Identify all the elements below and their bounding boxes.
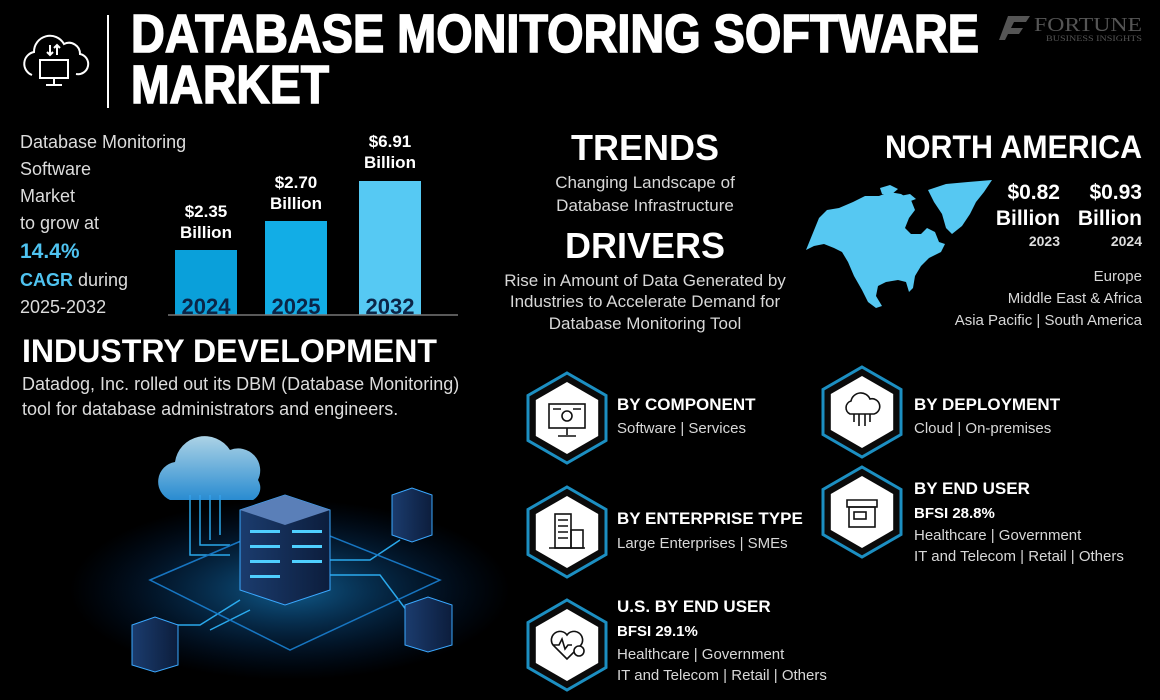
text: trends: Database Infrastructure: [556, 196, 734, 215]
heading: north america: NORTH AMERICA: [885, 129, 1142, 165]
text block: market growth: Market: [20, 186, 75, 206]
bar chart: Billion: [364, 153, 416, 172]
segment: by end user: IT and Telecom | Retail | Others: [914, 548, 1124, 565]
logo: [999, 14, 1142, 43]
text block: market growth: [20, 132, 186, 317]
segment: by component: BY COMPONENT: [617, 395, 756, 414]
heading: industry development: INDUSTRY DEVELOPMENT: [22, 333, 437, 369]
bar chart: 2024: [182, 294, 231, 319]
stats: north america values: 2023: [1029, 233, 1060, 249]
stats: north america values: $0.93: [1089, 181, 1142, 204]
title: DATABASE MONITORING SOFTWARE: [131, 4, 979, 64]
segment: by component: Software | Services: [617, 420, 746, 437]
heading: drivers: DRIVERS: [565, 225, 725, 266]
text: drivers: [504, 271, 786, 333]
text block: market growth: 14.4%: [20, 240, 80, 263]
segment: by enterprise type: [528, 487, 803, 577]
text: drivers: Industries to Accelerate Demand for: [510, 292, 780, 311]
segment: by deployment: BY DEPLOYMENT: [914, 395, 1061, 414]
text block: market growth: CAGR during: [20, 270, 128, 290]
stats: north america values: [996, 181, 1142, 249]
segment: by enterprise type: Large Enterprises | SMEs: [617, 535, 788, 552]
text block: market growth: to grow at: [20, 213, 99, 233]
text: other regions: Europe: [1094, 268, 1142, 285]
text block: market growth: 2025-2032: [20, 297, 106, 317]
segment: by deployment: Cloud | On-premises: [914, 420, 1051, 437]
bar chart: 2032: [366, 294, 414, 319]
heading: trends: TRENDS: [571, 127, 719, 168]
bar chart: Billion: [270, 194, 322, 213]
segment: u.s. by end user: Healthcare | Government: [617, 646, 785, 663]
segment: u.s. by end user: IT and Telecom | Retail | Others: [617, 667, 827, 684]
text: other regions: Middle East & Africa: [1008, 290, 1143, 307]
text: industry development: tool for database administrators and engineers.: [22, 399, 398, 419]
text: industry development: [22, 374, 459, 419]
map: north america: [806, 180, 992, 308]
stats: north america values: Billion: [1078, 207, 1142, 230]
bar chart: $6.91: [369, 132, 411, 151]
cloud: [158, 436, 260, 500]
servers: [132, 488, 452, 672]
bar chart: [168, 132, 458, 319]
text: other regions: [955, 268, 1143, 329]
illustration: cloud and servers: [70, 436, 510, 680]
text: trends: Changing Landscape of: [555, 173, 735, 192]
stats: north america values: Billion: [996, 207, 1060, 230]
text: trends: [555, 173, 735, 215]
segment: by end user: BY END USER: [914, 479, 1030, 498]
icon: cloud monitor: [24, 36, 88, 85]
stats: north america values: $0.82: [1007, 181, 1060, 204]
segment: by deployment: [823, 367, 1061, 457]
bar chart: Billion: [180, 223, 232, 242]
segment: by end user: Healthcare | Government: [914, 527, 1082, 544]
logo: BUSINESS INSIGHTS: [1046, 33, 1142, 43]
text: drivers: Rise in Amount of Data Generated by: [504, 271, 786, 290]
segment: u.s. by end user: U.S. BY END USER: [617, 597, 771, 616]
segment: by end user: [823, 467, 1124, 565]
bar chart: $2.70: [275, 173, 317, 192]
text: drivers: Database Monitoring Tool: [549, 314, 741, 333]
title: [131, 4, 979, 115]
stats: north america values: 2024: [1111, 233, 1142, 249]
text: other regions: Asia Pacific | South America: [955, 312, 1143, 329]
text: industry development: Datadog, Inc. rolled out its DBM (Database Monitoring): [22, 374, 459, 394]
logo: FORTUNE: [1034, 14, 1142, 36]
segment: by end user: BFSI 28.8%: [914, 505, 995, 522]
bar chart: 2025: [272, 294, 320, 319]
segment: u.s. by end user: BFSI 29.1%: [617, 623, 698, 640]
segment: by enterprise type: BY ENTERPRISE TYPE: [617, 509, 803, 528]
segment: by component: [528, 373, 756, 463]
text block: market growth: Database Monitoring: [20, 132, 186, 152]
segment: u.s. by end user: [528, 597, 827, 690]
title: MARKET: [131, 55, 329, 115]
bar chart: $2.35: [185, 202, 227, 221]
text block: market growth: Software: [20, 159, 91, 179]
